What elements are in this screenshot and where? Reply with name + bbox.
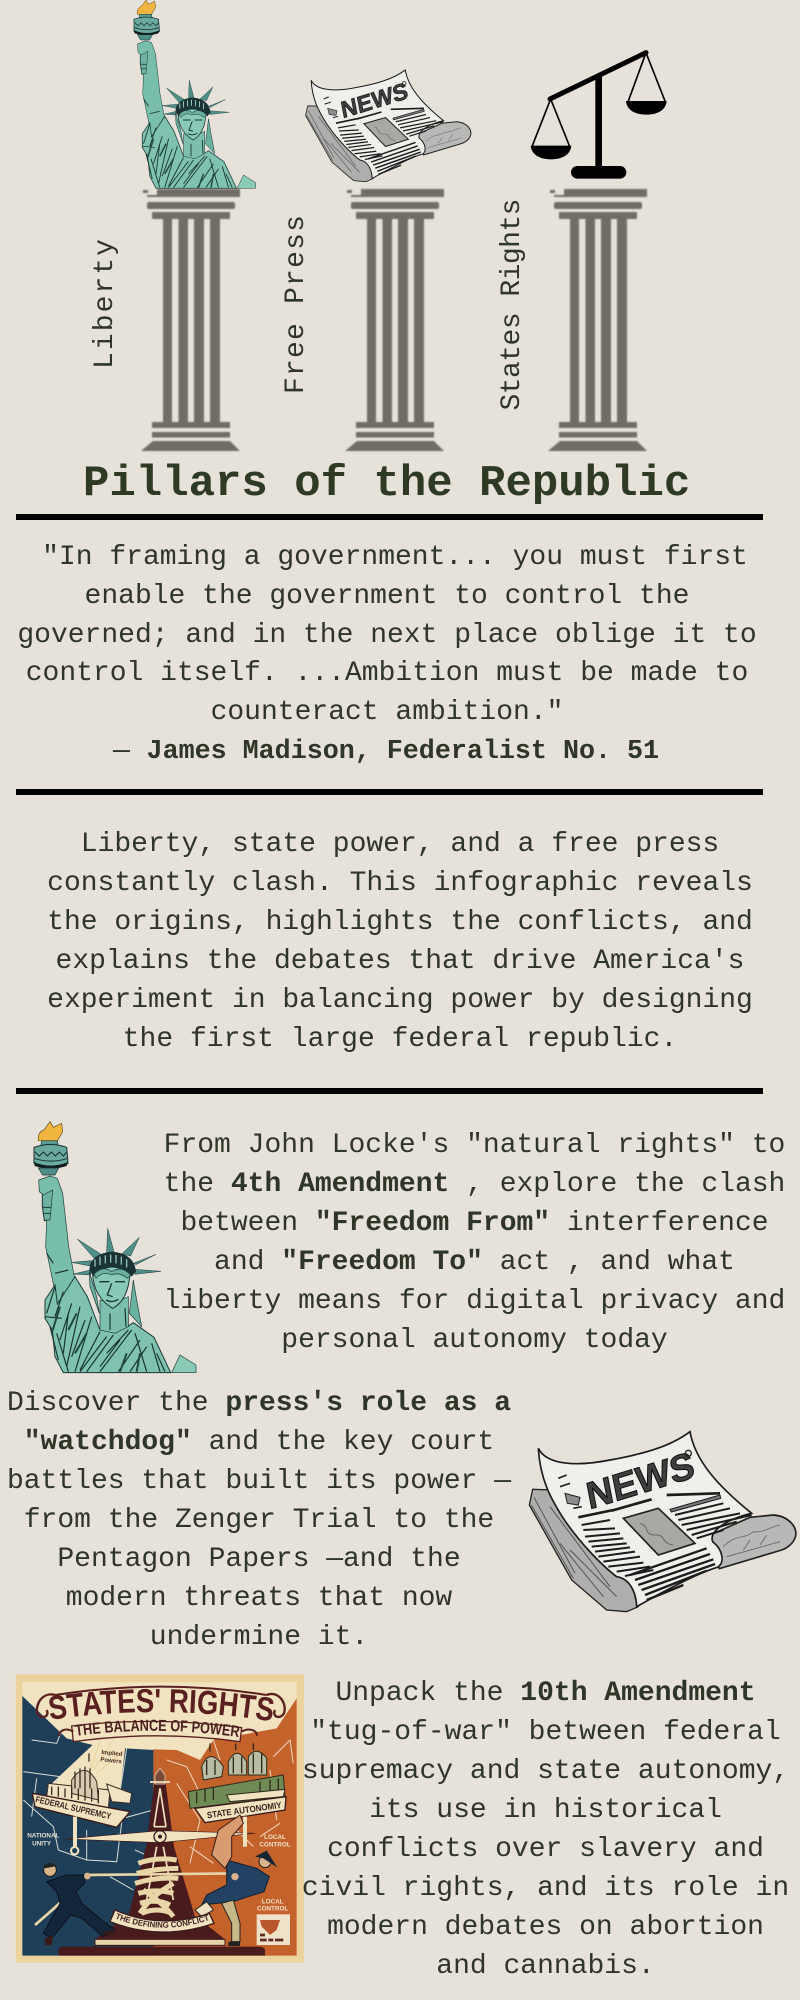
title: Pillars of the Republic <box>83 459 690 509</box>
icon: statue of liberty beside liberty text <box>34 1122 196 1373</box>
poster title: THE BALANCE OF POWER <box>74 1720 240 1738</box>
icon: statue of liberty on first column <box>134 0 256 188</box>
text: states rights section: modern debates on abortion <box>327 1912 764 1943</box>
defining conflict ribbon: THE DEFINING CONFLICT <box>116 1913 208 1928</box>
text: states rights section: supremacy and state autonomy, <box>302 1756 789 1787</box>
icon: balance scales on third column <box>531 53 667 179</box>
poster: states' rights balance of power <box>16 1674 304 1963</box>
central balance pillar <box>58 1768 265 1956</box>
column: free press <box>345 189 444 451</box>
quote: James Madison: governed; and in the next place oblige it to <box>17 620 757 651</box>
federal capitol <box>47 1753 132 1808</box>
label: Liberty: Liberty <box>90 239 121 369</box>
small map chart <box>257 1914 290 1945</box>
side labels on the map: UNITY <box>32 1840 52 1847</box>
quote: James Madison: — James Madison, Federalist No. 51 <box>113 736 659 767</box>
intro text: constantly clash. This infographic reveals <box>47 868 753 899</box>
text: liberty section: and "Freedom To" act , and what <box>214 1247 735 1278</box>
quote: James Madison: control itself. ...Ambition must be made to <box>26 658 748 689</box>
text: liberty section: From John Locke's "natural rights" to <box>164 1130 785 1161</box>
side labels on the map <box>27 1833 291 1913</box>
quote: James Madison: counteract ambition." <box>211 697 563 728</box>
text: states rights section: conflicts over slavery and <box>327 1834 764 1865</box>
intro text: Liberty, state power, and a free press <box>81 829 719 860</box>
side labels on the map: CONTROL <box>257 1906 288 1913</box>
poster title: STATES' RIGHTS <box>49 1688 274 1721</box>
intro text: the first large federal republic. <box>123 1024 677 1055</box>
implied powers note: Implied <box>101 1750 123 1758</box>
side labels on the map: NATIONAL <box>27 1833 60 1840</box>
text: free press section: undermine it. <box>150 1622 368 1653</box>
icon: newspaper beside press text <box>529 1432 796 1612</box>
quote: James Madison: enable the government to control the <box>85 581 689 612</box>
left figure federal side <box>43 1863 117 1945</box>
column: liberty <box>141 189 240 451</box>
label: States Rights: States Rights <box>497 198 528 410</box>
label: Free Press: Free Press <box>281 215 312 394</box>
text: liberty section: liberty means for digital privacy and <box>164 1286 785 1317</box>
text: free press section: Discover the press's role as a <box>7 1388 511 1419</box>
text: free press section <box>7 1388 512 1653</box>
column: states rights <box>548 189 647 451</box>
text: free press section: modern threats that now <box>66 1583 452 1614</box>
text: free press section: from the Zenger Trial to the <box>24 1505 494 1536</box>
text: liberty section <box>164 1130 785 1356</box>
text: liberty section: personal autonomy today <box>281 1325 668 1356</box>
text: free press section: battles that built its power — <box>7 1466 511 1497</box>
text: states rights section: Unpack the 10th Amendment <box>335 1678 756 1709</box>
icon: newspaper on second column <box>306 70 471 182</box>
intro text: experiment in balancing power by designing <box>47 985 753 1016</box>
text: free press section: "watchdog" and the key court <box>24 1427 494 1458</box>
text: states rights section <box>302 1678 789 1982</box>
implied powers note: Powers <box>100 1757 123 1765</box>
intro text <box>47 829 753 1055</box>
text: liberty section: the 4th Amendment , explore the clash <box>164 1169 785 1200</box>
quote: James Madison: "In framing a government... you must first <box>42 542 748 573</box>
text: states rights section: civil rights, and its role in <box>302 1873 789 1904</box>
state autonomy ribbon: STATE AUTONOMIY <box>206 1800 282 1820</box>
side labels on the map: LOCAL <box>264 1834 286 1841</box>
state capitols <box>188 1743 285 1808</box>
side labels on the map: CONTROL <box>259 1842 291 1849</box>
text: states rights section: and cannabis. <box>436 1951 655 1982</box>
text: free press section: Pentagon Papers —and the <box>57 1544 461 1575</box>
divider: under title <box>16 514 763 520</box>
right figure states side <box>195 1815 277 1946</box>
divider: under quote <box>16 789 763 795</box>
text: liberty section: between "Freedom From" interference <box>180 1208 769 1239</box>
federal supremacy ribbon: FEDERAL SUPREMCY <box>35 1794 112 1821</box>
state autonomy ribbon <box>195 1797 286 1823</box>
side labels on the map: LOCAL <box>262 1898 284 1905</box>
intro text: the origins, highlights the conflicts, and <box>47 907 753 938</box>
quote: James Madison <box>17 542 757 767</box>
text: states rights section: "tug-of-war" between federal <box>310 1717 781 1748</box>
rope tug of war <box>35 1859 242 1925</box>
balance beam <box>65 1817 255 1854</box>
text: states rights section: its use in historical <box>369 1795 722 1826</box>
intro text: explains the debates that drive America's <box>56 946 744 977</box>
divider: under intro <box>16 1088 763 1094</box>
